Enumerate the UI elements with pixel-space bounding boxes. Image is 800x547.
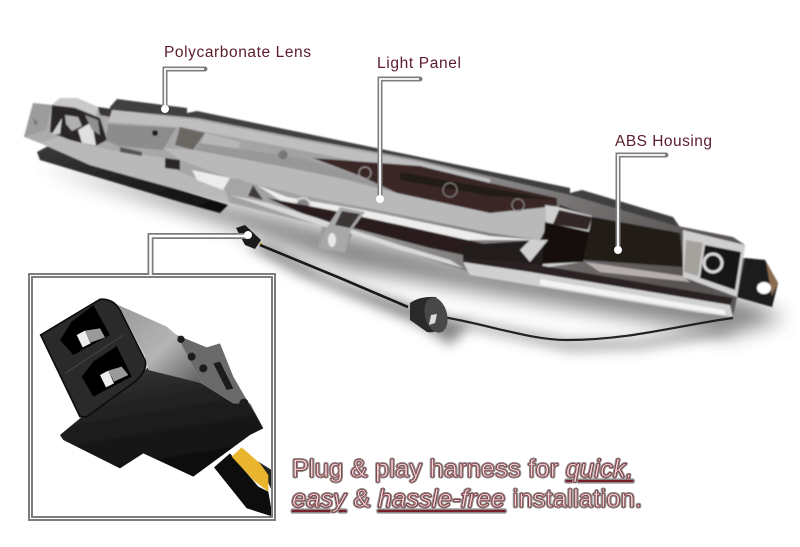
light housing xyxy=(24,98,778,317)
pale top band xyxy=(108,110,490,190)
right channel centre xyxy=(463,205,593,268)
callout: plug and play text xyxy=(290,455,642,514)
leader: light panel xyxy=(376,79,420,203)
rounded face xyxy=(41,299,146,417)
left lower rim xyxy=(40,137,230,203)
dark upper channel xyxy=(313,158,557,213)
left end cap xyxy=(24,103,52,137)
grommet xyxy=(410,297,447,332)
small tab xyxy=(230,178,268,203)
central bright panel xyxy=(163,148,557,240)
dark socket xyxy=(165,158,180,170)
callout: plug and play text: easy & hassle-free installation. xyxy=(292,485,642,513)
lower dark band xyxy=(267,198,490,255)
lower chrome trim xyxy=(463,258,733,306)
yellow wire xyxy=(232,447,268,492)
black rear strip xyxy=(110,99,682,230)
label: light panel: Light Panel xyxy=(377,55,461,72)
plug xyxy=(236,225,261,249)
connector inset frame xyxy=(29,274,275,520)
leader: polycarbonate lens xyxy=(161,69,205,113)
mid grey panel xyxy=(106,124,176,150)
right compartment xyxy=(583,217,683,267)
rear grey face xyxy=(177,335,263,428)
mounting tab xyxy=(318,207,365,253)
upper socket xyxy=(60,305,110,355)
label: abs housing: ABS Housing xyxy=(615,133,712,150)
leader: abs housing xyxy=(614,155,666,254)
wire xyxy=(260,245,408,307)
leader: harness connector xyxy=(150,231,252,276)
drop shadow xyxy=(40,165,785,352)
white lower bands xyxy=(192,170,230,190)
face divider xyxy=(65,335,123,373)
yellow tip xyxy=(260,242,262,246)
connector closeup xyxy=(41,299,273,517)
left cavity xyxy=(50,105,107,148)
upper flange xyxy=(52,98,98,116)
connector body xyxy=(60,367,263,477)
latch dots xyxy=(177,336,249,408)
callout: plug and play text: Plug & play harness for quick, xyxy=(292,455,633,483)
right end xyxy=(683,230,745,297)
wiring harness xyxy=(236,225,733,340)
window xyxy=(175,127,205,150)
hole ring xyxy=(296,198,310,212)
lower black strip xyxy=(37,145,228,213)
top grey face xyxy=(118,305,202,383)
label: polycarbonate lens: Polycarbonate Lens xyxy=(164,44,311,61)
sleeve xyxy=(214,453,273,517)
chrome body xyxy=(24,98,778,317)
lower socket xyxy=(82,346,132,397)
wire right xyxy=(443,317,733,340)
end bracket xyxy=(737,258,778,307)
